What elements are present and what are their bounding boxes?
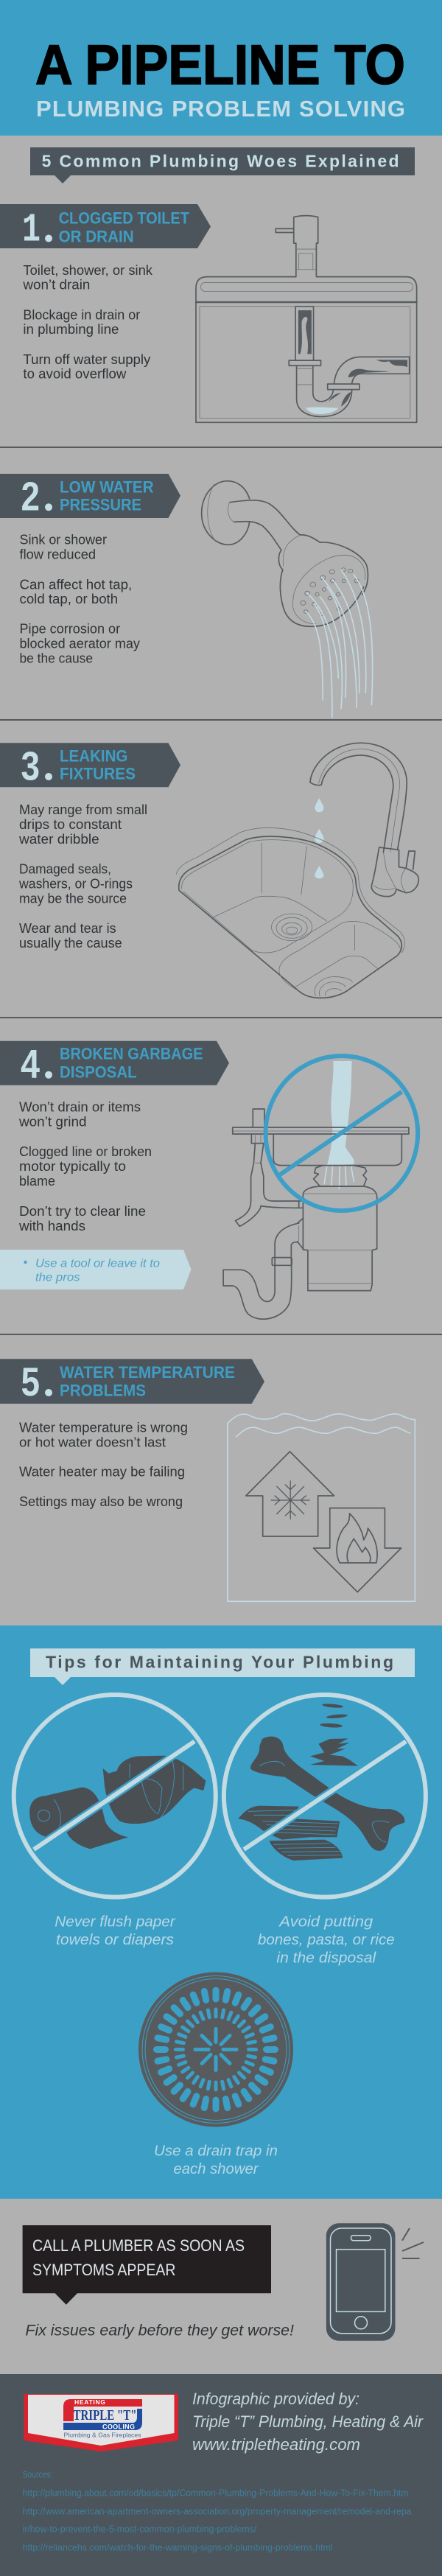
text: clogged symptoms: in plumbing line [23,322,119,337]
text: provided by: Infographic provided by: [192,2390,359,2408]
heading: tips: Tips for Maintaining Your Plumbing [46,1652,393,1671]
icon: drain trap [138,1972,293,2127]
text: clogged symptoms: Turn off water supply [23,352,150,367]
text: never flush: Never flush paper [55,1914,176,1930]
text: temperature symptoms: Water heater may be failing [19,1465,185,1480]
heading: 5 common woes: 5 Common Plumbing Woes Explained [42,152,399,171]
tag 3: 3 [21,743,40,788]
text: never flush: towels or diapers [56,1932,174,1948]
subtitle: PLUMBING PROBLEM SOLVING [36,96,405,122]
text: clogged symptoms: Toilet, shower, or sink [23,263,153,278]
text: disposal symptoms: Don’t try to clear line [19,1204,146,1219]
tag 3: LEAKING [60,746,127,765]
text: clogged symptoms [22,263,153,382]
text: disposal symptoms: Won’t drain or items [19,1099,141,1114]
tag 5: 5 [21,1359,40,1404]
tag 1: CLOGGED TOILET [59,209,190,227]
text: clogged symptoms: won’t drain [22,278,90,293]
text: provided by: www.tripletheating.com [192,2435,360,2454]
text: sources: http://plumbing.about.com/od/basics/tp/Common-Plumbing-Problems-And-How-To-Fix-Them.htm [23,2488,409,2499]
tag 3: FIXTURES [60,764,136,783]
text: pressure symptoms: cold tap, or both [19,592,118,606]
text: drain trap: Use a drain trap in [154,2143,278,2159]
logo: Triple T: Plumbing & Gas Fireplaces [63,2432,141,2438]
text: sources: Sources: [23,2469,53,2480]
tag 1: OR DRAIN [59,228,134,246]
text: disposal symptoms: motor typically to [19,1159,126,1174]
text: pressure symptoms: Pipe corrosion or [19,621,120,636]
text: clogged symptoms: Blockage in drain or [23,307,140,322]
text: pressure symptoms: blocked aerator may [19,636,140,651]
tag 2: 2 [21,474,40,519]
text: sources [23,2469,412,2553]
text: pressure symptoms: flow reduced [19,547,96,561]
icon: phone [326,2223,424,2341]
title: A PIPELINE TO [35,34,405,97]
tag 4: BROKEN GARBAGE [60,1045,203,1063]
text: disposal symptoms [18,1099,152,1233]
icon: no bones pasta or rice [224,1695,426,1897]
panel: maintenance tips [0,1625,442,2199]
tag 2: LOW WATER [60,477,154,496]
tag 4: DISPOSAL [60,1063,137,1082]
tag 3 [0,743,180,788]
callout: use a tool: Use a tool or leave it to [35,1257,160,1270]
tag 2: PRESSURE [60,495,141,514]
icon: hot and cold water tank [228,1414,415,1601]
heading: 5 common woes [30,147,415,183]
tag 1: 1 [22,207,41,253]
text: temperature symptoms: Water temperature is wrong [19,1420,188,1435]
logo: Triple T: TRIPLE "T" [74,2407,137,2423]
panel: leaking fixtures [0,743,418,998]
tag 4 [0,1041,229,1087]
text: drain trap: each shower [174,2161,259,2177]
tag 5: PROBLEMS [60,1381,146,1399]
icon: sink and clogged pipe [196,216,417,422]
callout: call a plumber: SYMPTOMS APPEAR [32,2261,175,2279]
text: leak symptoms: drips to constant [19,817,122,832]
text: disposal symptoms: with hands [18,1219,85,1233]
logo: Triple T: HEATING [74,2398,105,2406]
text: pressure symptoms: Can affect hot tap, [19,577,132,592]
tag 2 [0,474,180,519]
text: provided by: Triple “T” Plumbing, Heating & Air [192,2412,424,2431]
text: leak symptoms: washers, or O-rings [18,877,133,892]
text: pressure symptoms: be the cause [19,651,93,665]
text: leak symptoms: usually the cause [19,936,122,951]
tag 5 [0,1359,264,1404]
footer [0,2374,442,2576]
header [0,0,442,136]
text: temperature symptoms: Settings may also be wrong [19,1494,183,1509]
panel: broken garbage disposal [0,1041,418,1319]
text: pressure symptoms: Sink or shower [19,532,107,547]
logo: Triple T [24,2394,178,2451]
tag 1 [0,204,211,253]
panel: water temperature problems [0,1359,415,1601]
text: drain trap [154,2143,278,2177]
text: leak symptoms: Wear and tear is [19,921,116,936]
icon: leaky faucet and sink [176,743,418,998]
text: never flush [55,1914,176,1948]
callout: use a tool: the pros [35,1271,80,1284]
tag 4: 4 [21,1041,40,1087]
callout: call a plumber [23,2225,271,2305]
text: leak symptoms: May range from small [19,802,147,817]
icon: shower head [202,481,373,717]
text: avoid putting: bones, pasta, or rice [258,1932,395,1948]
text: leak symptoms: Damaged seals, [19,862,111,877]
panel: clogged toilet [0,204,417,422]
text: leak symptoms [18,802,147,951]
text: disposal symptoms: won’t grind [18,1114,87,1129]
text: sources: ir/how-to-prevent-the-5-most-common-plumbing-problems/ [23,2524,257,2535]
text: avoid putting: in the disposal [276,1950,376,1966]
heading: tips [30,1648,415,1685]
text: sources: http://www.american-apartment-owners-association.org/property-management/remodel-and-repa [23,2505,412,2516]
callout: call a plumber: CALL A PLUMBER AS SOON AS [32,2236,245,2255]
text: disposal symptoms: blame [19,1174,55,1189]
text: avoid putting [258,1914,395,1966]
text: clogged symptoms: to avoid overflow [23,367,127,382]
text: provided by [192,2390,424,2454]
text: fix issues early: Fix issues early before they get worse! [25,2322,294,2339]
text: leak symptoms: water dribble [18,832,99,847]
panel: low water pressure [0,474,373,717]
text: pressure symptoms [19,532,140,665]
callout: use a tool [0,1250,192,1289]
tag 5: WATER TEMPERATURE [60,1363,235,1382]
text: sources: http://reliancehs.com/watch-for-the-warning-signs-of-plumbing-problems.html [23,2542,333,2553]
text: disposal symptoms: Clogged line or broken [19,1144,152,1159]
icon: garbage disposal [223,1056,418,1319]
text: temperature symptoms: or hot water doesn’t last [19,1435,166,1449]
icon: no paper towels or diapers [14,1695,216,1897]
text: leak symptoms: may be the source [19,892,127,906]
text: avoid putting: Avoid putting [278,1914,373,1930]
text: temperature symptoms [19,1420,188,1509]
logo: Triple T: COOLING [102,2423,135,2430]
